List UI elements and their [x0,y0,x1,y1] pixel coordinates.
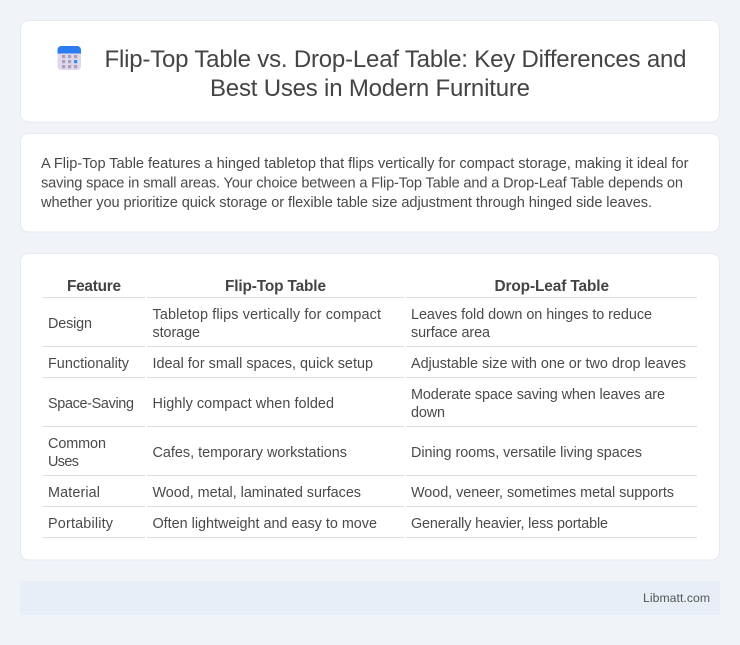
panel: comparison table [20,254,720,560]
row: portability: Often lightweight and easy to move [152,516,377,532]
heading [104,46,686,102]
row: portability: Generally heavier, less portable [411,516,608,532]
row: design: Tabletop flips vertically for compact [152,307,381,323]
summary text: A Flip-Top Table features a hinged tabletop that flips vertically for compact storage, making it ideal for [41,156,689,172]
table header: Flip-Top Table [225,278,326,295]
row: space-saving: down [411,405,445,421]
row: common uses: Uses [48,454,79,470]
row: material: Material [48,485,100,501]
row: space-saving: Moderate space saving when leaves are [411,387,665,403]
heading: Flip-Top Table vs. Drop-Leaf Table: Key Differences and [104,46,686,73]
row: design: Design [48,316,92,332]
footer credit: Libmatt.com [643,591,710,605]
row: space-saving [43,387,697,427]
row: portability [43,516,697,538]
table header: Drop-Leaf Table [494,278,609,295]
table header: Feature [67,278,121,295]
row: material: Wood, veneer, sometimes metal supports [411,485,674,501]
panel: title [20,20,720,122]
row: design: Leaves fold down on hinges to reduce [411,307,652,323]
table header [43,278,697,298]
icon: calendar [58,46,81,70]
heading: Best Uses in Modern Furniture [210,75,530,102]
row: space-saving: Highly compact when folded [152,396,334,412]
row: functionality: Functionality [48,356,130,372]
row: common uses: Cafes, temporary workstations [152,445,347,461]
row: design [43,307,697,347]
row: functionality: Ideal for small spaces, quick setup [152,356,373,372]
row: functionality: Adjustable size with one or two drop leaves [411,356,686,372]
row: common uses: Dining rooms, versatile living spaces [411,445,642,461]
row: material: Wood, metal, laminated surfaces [152,485,361,501]
row: common uses: Common [48,436,106,452]
row: common uses [43,436,697,476]
row: space-saving: Space-Saving [48,396,134,412]
row: portability: Portability [48,516,114,532]
footer [20,581,720,615]
row: material [43,485,697,507]
summary text [40,156,689,211]
summary text: saving space in small areas. Your choice between a Flip-Top Table and a Drop-Leaf Table depends on [41,176,683,192]
row: design: surface area [411,325,490,341]
row: functionality [43,356,697,378]
summary text: whether you prioritize quick storage or flexible table size adjustment through hinged side leaves. [40,195,652,211]
panel: summary [20,134,720,232]
row: design: storage [152,325,200,341]
